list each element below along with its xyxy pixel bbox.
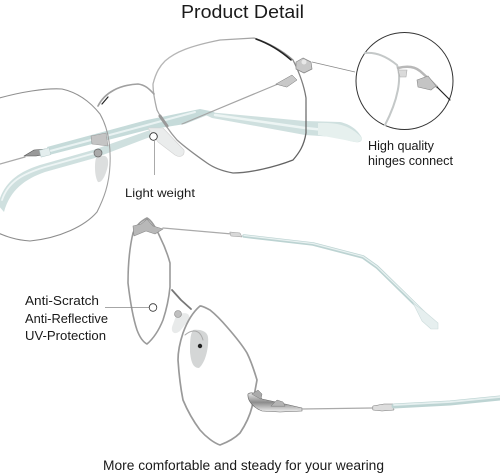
- rim dark highlight: [256, 39, 291, 60]
- nose pads: [91, 116, 184, 182]
- callout: lens coatings: UV-Protection: [25, 329, 106, 343]
- bottom glasses: [128, 218, 500, 445]
- callout: lens coatings: Anti-Scratch: [25, 294, 99, 308]
- bridge: [172, 290, 191, 309]
- label: hinges: High quality: [368, 139, 435, 153]
- hinge: [296, 58, 312, 73]
- far hinge: [133, 219, 163, 236]
- callout: light weight: Light weight: [125, 186, 196, 200]
- near hinge: [248, 390, 302, 412]
- front temple arm: [0, 75, 297, 164]
- lower temple arm: [302, 397, 500, 411]
- callout: hinge zoom: [312, 32, 453, 130]
- caption: More comfortable and steady for your wearing: [103, 458, 384, 473]
- hinge detail drawing: [365, 53, 450, 125]
- near lens rim: [178, 306, 257, 445]
- callout: lens coatings: Anti-Reflective: [25, 312, 108, 326]
- callout: lens coatings: [25, 294, 157, 343]
- back temple arm, lower: [0, 111, 362, 212]
- bridge: [98, 84, 154, 106]
- nose pads: [172, 310, 208, 368]
- top glasses: [0, 38, 362, 241]
- callout: light weight: [125, 133, 196, 200]
- far lens rim: [128, 218, 170, 344]
- upper temple arm: [163, 228, 438, 329]
- title: Product Detail: [181, 1, 304, 22]
- left lens rim: [0, 89, 110, 241]
- label: hinges: hinges connect: [368, 154, 454, 168]
- right lens rim: [153, 38, 306, 173]
